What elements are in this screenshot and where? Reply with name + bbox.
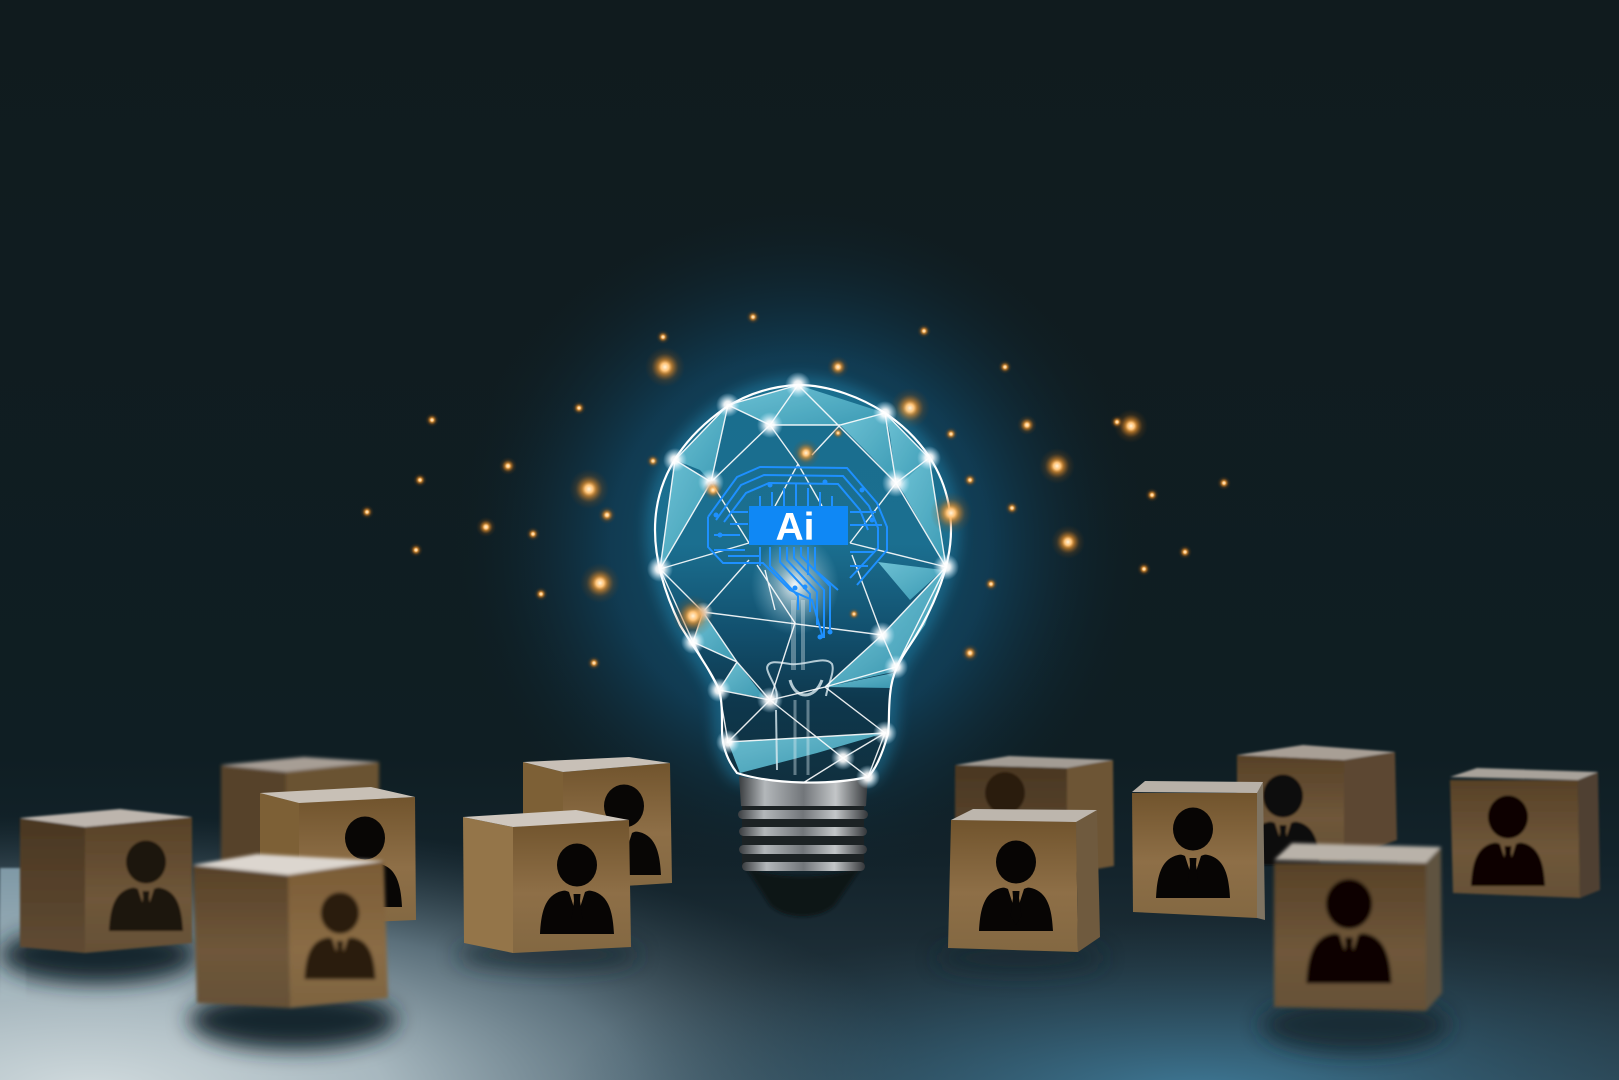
block: center, person icon [463, 810, 631, 953]
block: back left [221, 757, 379, 880]
block: right back, dim person icon [955, 756, 1114, 874]
bulb: glowing nodes [647, 372, 959, 789]
block: far right, person icon [1450, 768, 1600, 898]
bulb: stem light beams [791, 600, 805, 670]
block: right center, person icon [1132, 781, 1265, 920]
bulb: circuit solder dots [714, 480, 874, 640]
light bulb [647, 372, 972, 916]
block: behind center, person icon [523, 757, 672, 890]
bulb: teal facets [660, 385, 946, 773]
bulb: inner light core [751, 535, 839, 635]
orange particles near the glass [672, 427, 972, 637]
orange light particles [360, 310, 1231, 670]
block: front-left, blurred, person icon [193, 854, 388, 1008]
block: center-left, person icon [260, 787, 416, 925]
bulb: AI chip label [749, 506, 848, 549]
bulb: glass [655, 385, 951, 783]
bulb: filament stem [767, 660, 833, 775]
block shadows on the floor [0, 927, 1449, 1053]
bulb: white outline [655, 385, 951, 783]
block: front right, blurred, person icon [1274, 843, 1442, 1011]
block: left, person icon [20, 809, 192, 953]
bulb: AI circuit brain [708, 467, 887, 638]
block: right center-left, person icon [948, 809, 1100, 952]
block: back right, person icon [1237, 745, 1397, 865]
bulb: outer blue glow [655, 385, 951, 783]
bulb: screw base [738, 776, 868, 916]
bulb: AI chip label: Ai [776, 506, 814, 549]
bulb: white wireframe [660, 385, 946, 783]
